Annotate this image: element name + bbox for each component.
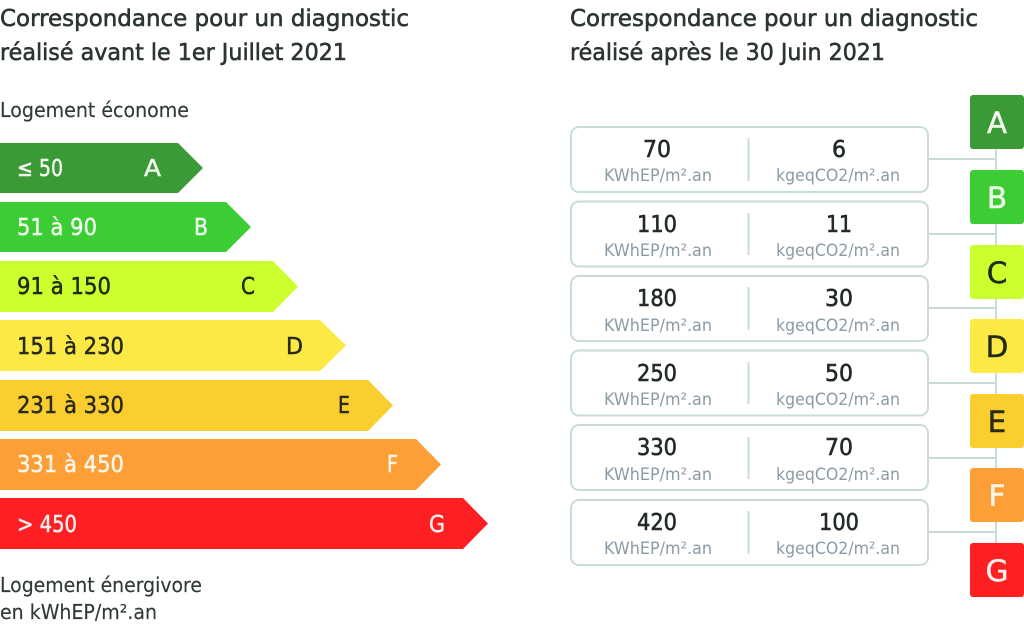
label: logement énergivore (0, 573, 202, 624)
card B: kgeqCO2/m².an (776, 241, 900, 261)
heading: after June 2021: Correspondance pour un diagnostic (570, 4, 978, 32)
bar D (0, 320, 346, 371)
badge E: E (988, 405, 1006, 439)
bar G (0, 498, 488, 549)
badge B (970, 170, 1024, 224)
bar B (0, 202, 251, 252)
energy bars chart (0, 143, 488, 549)
card B: 110 (637, 212, 677, 238)
bar F: F (387, 452, 398, 478)
connector lines (929, 149, 996, 543)
bar A: A (144, 156, 161, 182)
badge F (970, 468, 1024, 522)
badge C (970, 245, 1024, 299)
bar D: 151 à 230 (17, 334, 124, 360)
label: logement énergivore: Logement énergivore (0, 573, 202, 597)
bar F (0, 439, 441, 490)
bar B: B (194, 215, 208, 241)
badge C: C (987, 256, 1007, 290)
heading: after June 2021: réalisé après le 30 Juin 2021 (570, 38, 885, 66)
badge A (970, 95, 1024, 149)
card F: 100 (819, 510, 859, 536)
heading: before July 2021: réalisé avant le 1er Juillet 2021 (0, 38, 347, 66)
badge A: A (987, 106, 1007, 140)
bar G: G (429, 512, 445, 538)
letter badges (970, 95, 1024, 597)
card C (571, 276, 928, 341)
bar B: 51 à 90 (17, 215, 97, 241)
card B: KWhEP/m².an (604, 241, 712, 261)
card D: kgeqCO2/m².an (776, 390, 900, 410)
card A: kgeqCO2/m².an (776, 166, 900, 186)
label: logement économe: Logement économe (0, 98, 189, 122)
card D (571, 350, 928, 416)
bar F: 331 à 450 (17, 452, 124, 478)
card C: 180 (637, 286, 677, 312)
bar E (0, 380, 393, 431)
card E: 330 (637, 435, 677, 461)
heading: after June 2021 (570, 4, 978, 66)
card B: 11 (826, 212, 852, 238)
card C: 30 (825, 286, 853, 312)
badge E (970, 394, 1024, 448)
bar C (0, 261, 298, 312)
heading: before July 2021 (0, 4, 409, 66)
bar A: ≤ 50 (17, 156, 63, 182)
card E (571, 425, 928, 490)
card A (571, 127, 928, 192)
card A: 6 (832, 137, 846, 163)
card A: KWhEP/m².an (604, 166, 712, 186)
threshold cards (571, 127, 928, 565)
bar D: D (286, 334, 303, 360)
card C: KWhEP/m².an (604, 316, 712, 336)
heading: before July 2021: Correspondance pour un diagnostic (0, 4, 409, 32)
bar E: 231 à 330 (17, 393, 124, 419)
card C: kgeqCO2/m².an (776, 316, 900, 336)
card A: 70 (643, 137, 671, 163)
card E: kgeqCO2/m².an (776, 465, 900, 485)
bar C: C (241, 274, 255, 300)
card D: 250 (637, 361, 677, 387)
card F: KWhEP/m².an (604, 539, 712, 559)
badge D (970, 319, 1024, 373)
card D: KWhEP/m².an (604, 390, 712, 410)
badge F: F (989, 479, 1005, 513)
badge B: B (987, 181, 1007, 215)
card E: KWhEP/m².an (604, 465, 712, 485)
card F (571, 500, 928, 565)
card F: 420 (637, 510, 677, 536)
card F: kgeqCO2/m².an (776, 539, 900, 559)
card D: 50 (825, 361, 853, 387)
bar G: > 450 (17, 512, 77, 538)
card E: 70 (825, 435, 853, 461)
bar E: E (338, 393, 350, 419)
badge D: D (986, 330, 1008, 364)
card B (571, 202, 928, 266)
badge G (970, 543, 1024, 597)
bar C: 91 à 150 (17, 274, 111, 300)
bar A (0, 143, 203, 193)
label: logement énergivore: en kWhEP/m².an (0, 600, 157, 624)
badge G: G (986, 554, 1008, 588)
